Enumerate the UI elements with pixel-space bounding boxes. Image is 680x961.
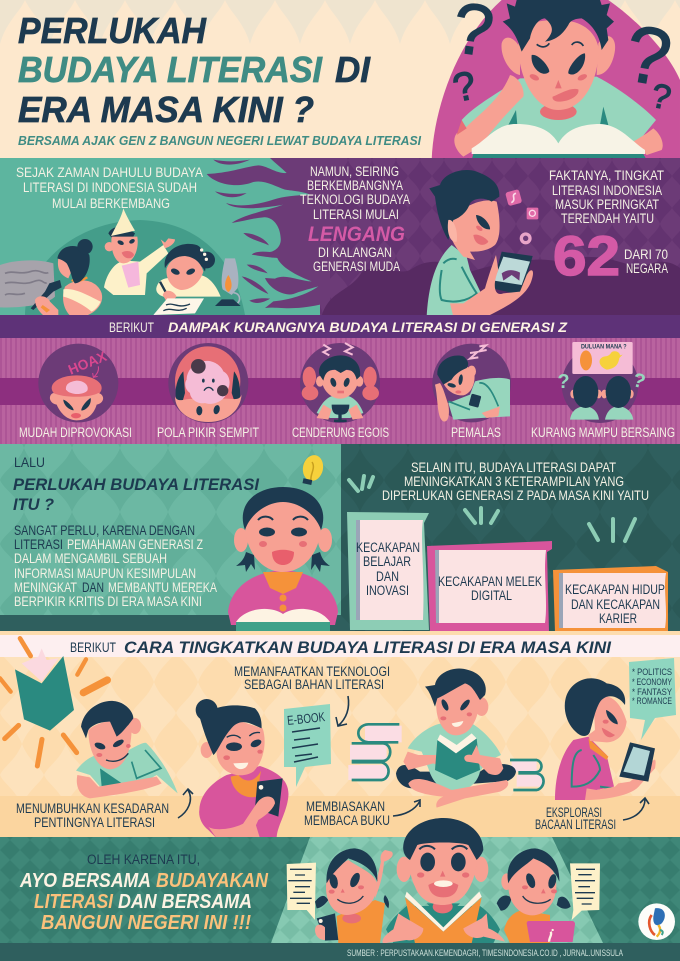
icon: question marks: ? [449,63,480,111]
text block: namun seiring: GENERASI MUDA [313,259,400,274]
illustration: pink dome with reading boy [432,0,680,160]
text: body: SANGAT PERLU, KARENA DENGAN [14,523,195,538]
caption: membaca: MEMBACA BUKU [304,813,390,828]
text: body: DALAM MENGAMBIL SEBUAH [14,551,167,566]
icon: poster with two students: ? [557,371,570,393]
caption: teknologi: MEMANFAATKAN TEKNOLOGI [234,664,390,679]
subtitle: BERSAMA AJAK GEN Z BANGUN NEGERI LEWAT BUDAYA LITERASI [18,133,421,148]
text: skills intro: SELAIN ITU, BUDAYA LITERASI DAPAT [411,460,616,475]
illustration: girl with book [228,487,338,631]
title: BUDAYA LITERASI [18,49,323,90]
book: kecakapan hidup [553,566,668,632]
icon: question marks [448,0,678,118]
icon: book stacks [348,724,544,790]
icon: narrow mind [168,343,248,423]
text: ajakan: BANGUN NEGERI INI !!! [41,912,251,934]
purple wavy flames [207,158,330,315]
text: ajakan: DAN BERSAMA [118,891,252,913]
panel: closing call to action [0,818,680,943]
text block: namun seiring: LITERASI MULAI [313,207,399,222]
text: oleh karena itu: OLEH KARENA ITU, [87,852,200,867]
text: body: MENINGKAT [14,580,77,595]
text: heading: ITU ? [13,495,55,514]
icon: selfish [300,343,380,423]
footer: sources [0,943,680,961]
icon: hoax [38,344,118,422]
text block: namun seiring: NAMUN, SEIRING [310,164,399,179]
title: PERLUKAH [18,10,207,51]
icon: question marks: ? [619,8,678,103]
text block: sejak zaman dahulu: LITERASI DI INDONESIA SUDAH [23,180,197,195]
illustration: boy with phone [427,170,538,317]
text block: fakta literasi [549,168,668,287]
caption: teknologi [234,664,390,692]
text: body: MEMBANTU MEREKA [108,580,217,595]
illustration: right girl with laptop [497,848,600,943]
heading bar: dampak: DAMPAK KURANGNYA BUDAYA LITERASI DI GENERASI Z [168,319,567,335]
title: DI [335,49,371,90]
book: kecakapan belajar [347,512,429,630]
text block: sejak zaman dahulu [16,165,203,211]
text block: namun seiring [300,164,410,274]
labels: MUDAH DIPROVOKASI [19,425,132,440]
icon: genre bubble [629,658,676,740]
caption: eksplorasi: BACAAN LITERASI [535,817,616,832]
book: kecakapan melek digital: KECAKAPAN MELEK [438,574,542,589]
text: ajakan: AYO BERSAMA [19,870,151,892]
icon: e-book note [284,704,331,787]
caption: teknologi: SEBAGAI BAHAN LITERASI [244,677,384,692]
icon: rays [349,476,635,541]
arrow [623,798,649,820]
icon: e-book note: E-BOOK [286,709,326,728]
heading: CARA TINGKATKAN BUDAYA LITERASI DI ERA MASA KINI [124,638,612,657]
icon: genre bubble: * FANTASY [632,687,673,698]
caption: eksplorasi [535,805,616,832]
arrow [393,800,420,816]
book: kecakapan hidup: KARIER [599,611,637,626]
book: kecakapan belajar: INOVASI [366,583,409,598]
labels: PEMALAS [451,425,501,440]
arrow [336,696,349,726]
oil lamp [215,258,241,306]
icon: social apps [505,189,538,244]
panel: cara tingkatkan [0,631,680,838]
text: body: BERPIKIR KRITIS DI ERA MASA KINI [14,594,202,609]
stone tablet [0,260,55,308]
icon: glowing book [0,638,107,766]
heading [0,635,680,657]
illustration: woman with phone [196,699,288,838]
panel: impacts [0,338,680,444]
illustration: boy reading cross-legged [396,669,516,808]
text block: sejak zaman dahulu: SEJAK ZAMAN DAHULU BUDAYA [16,165,203,180]
text block: namun seiring: LENGANG [308,223,405,246]
book: kecakapan belajar: BELAJAR [363,554,411,569]
book: kecakapan melek digital [427,541,552,632]
header panel [0,0,680,160]
writing girl [153,244,221,315]
panel: perlukah budaya literasi [0,444,680,632]
text block: namun seiring: DI KALANGAN [318,245,392,260]
title [18,10,371,130]
book: kecakapan belajar: KECAKAPAN [356,540,420,555]
man with cone hat [104,208,175,295]
text block: fakta literasi: 62 [553,224,620,287]
labels: POLA PIKIR SEMPIT [157,425,259,440]
icon: light bulb [301,453,325,485]
heading: BERIKUT [70,640,116,655]
caption: eksplorasi: EKSPLORASI [546,805,602,820]
text: body [14,523,217,609]
illustration: woman with tablet [555,678,656,800]
text: skills intro: MENINGKATKAN 3 KETERAMPILAN YANG [404,474,624,489]
illustration: three historic figures [0,208,241,318]
book: kecakapan belajar: DAN [376,569,399,584]
icon: question marks: ? [648,77,674,118]
icon: lazy [432,344,511,422]
caption: kesadaran: PENTINGNYA LITERASI [34,815,155,830]
illustration: center boy with book [382,818,505,943]
text: skills intro [382,460,649,503]
illustration: boy leaning [76,701,178,798]
text block: fakta literasi: DARI 70 [624,247,668,262]
panel: history and technology [0,158,680,318]
title: ERA MASA KINI ? [18,89,314,130]
heading bar: dampak: BERIKUT [109,320,154,335]
text: heading: LALU [14,455,45,470]
text block: namun seiring: TEKNOLOGI BUDAYA [300,192,410,207]
text: ajakan: LITERASI [34,891,113,913]
text: body: DAN [82,580,104,595]
arrow [178,789,193,818]
text: body: PEMAHAMAN GENERASI Z [67,537,203,552]
caption: membaca [304,799,390,828]
icon: hoax: HOAX [66,348,109,378]
text block: fakta literasi: MASUK PERINGKAT [555,197,659,212]
caption: membaca: MEMBIASAKAN [306,799,385,814]
text block: fakta literasi: FAKTANYA, TINGKAT [549,168,664,183]
text block: sejak zaman dahulu: MULAI BERKEMBANG [52,196,170,211]
text: heading: PERLUKAH BUDAYA LITERASI [13,475,260,494]
icon: poster with two students: DULUAN MANA ? [581,344,627,351]
girl with microphone [31,239,102,318]
text block: namun seiring: BERKEMBANGNYA [307,178,403,193]
text: heading [13,455,260,514]
icon: poster with two students [557,342,648,423]
icon: logo [638,903,675,940]
text: body: INFORMASI MAUPUN KESIMPULAN [14,566,196,581]
text: ajakan [19,870,268,934]
text: ajakan: BUDAYAKAN [156,870,268,892]
text block: fakta literasi: TERENDAH YAITU [561,211,654,226]
illustration: left girl with note [287,848,393,943]
text: body: LITERASI [14,537,63,552]
caption: kesadaran: MENUMBUHKAN KESADARAN [16,801,169,816]
heading bar: dampak [0,315,680,338]
book: kecakapan melek digital: DIGITAL [471,588,512,603]
labels: CENDERUNG EGOIS [292,425,389,440]
caption: kesadaran [16,801,169,830]
labels [19,425,675,440]
icon: poster with two students: ? [630,369,648,394]
